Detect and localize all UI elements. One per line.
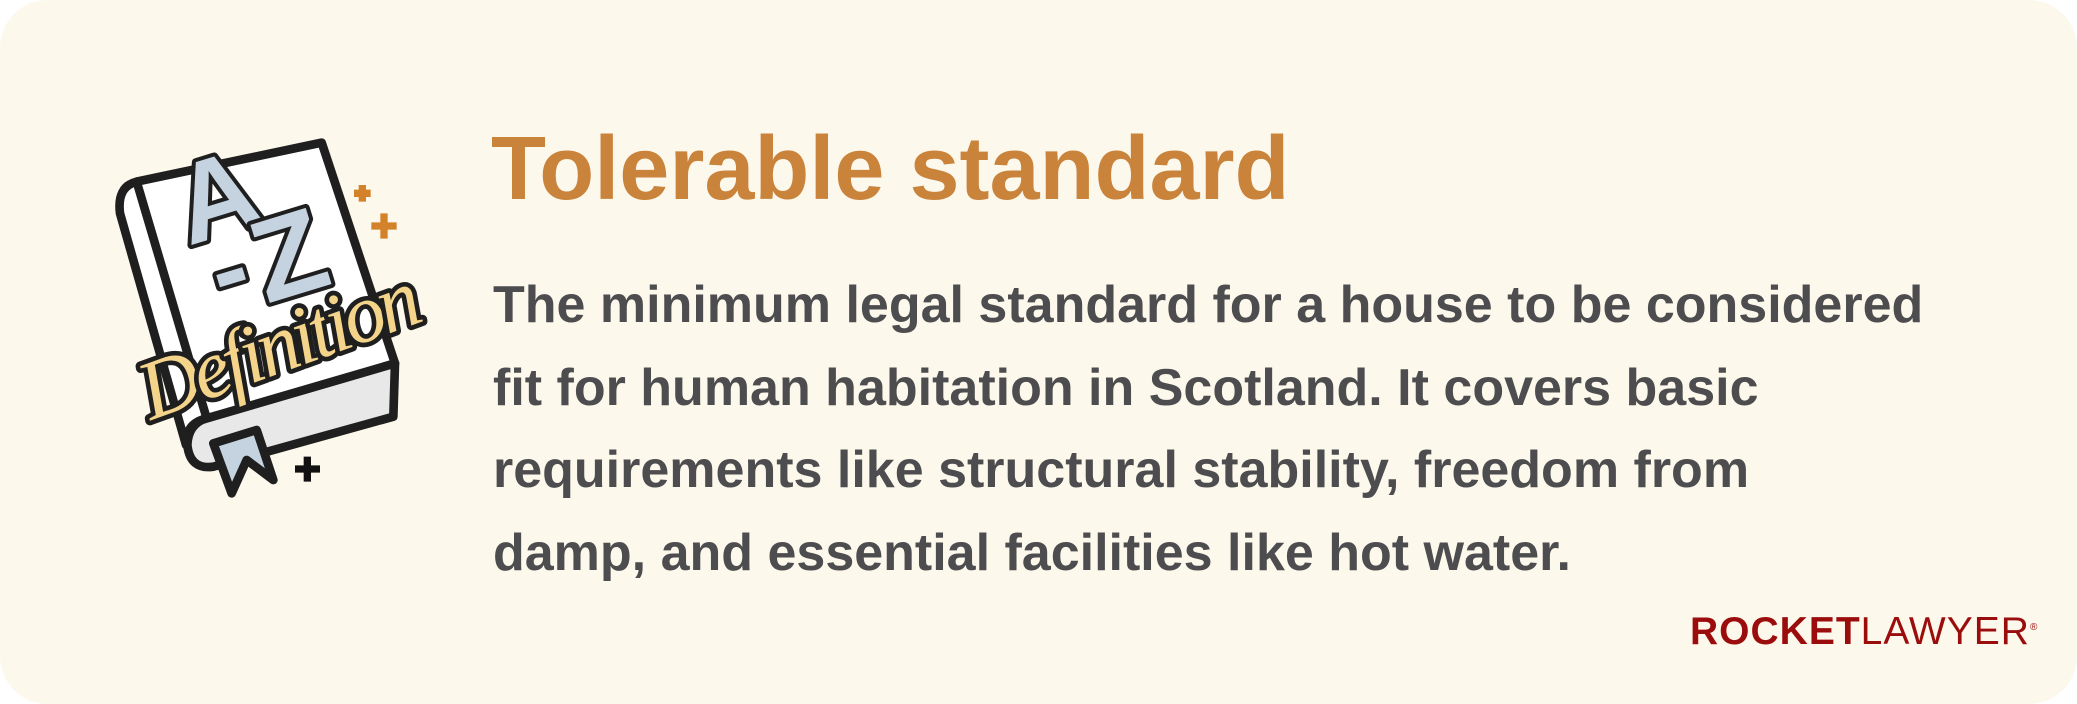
text block: definition xyxy=(493,276,1923,582)
icon: A-Z definition book xyxy=(115,124,433,498)
icon: A-Z definition book: A xyxy=(159,124,274,270)
text block: definition: fit for human habitation in Scotland. It covers basic xyxy=(493,358,1758,416)
icon: A-Z definition book: Z xyxy=(236,182,342,328)
text block: definition: The minimum legal standard for a house to be considered xyxy=(493,276,1923,334)
logo: Rocket Lawyer: ROCKETLAWYER® xyxy=(1690,610,2038,653)
icon: A-Z definition book: Definition xyxy=(125,251,433,439)
text block: definition: damp, and essential facilities like hot water. xyxy=(493,524,1571,582)
icon: A-Z definition book: - xyxy=(194,206,263,331)
title: Tolerable standard xyxy=(491,119,1290,219)
text block: definition: requirements like structural stability, freedom from xyxy=(493,441,1749,499)
